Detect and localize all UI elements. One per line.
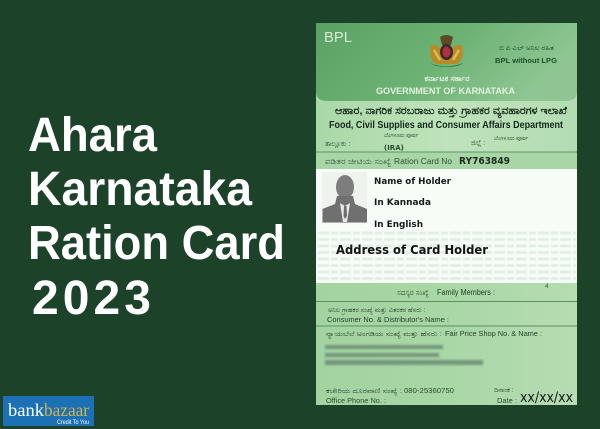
faded text pattern — [318, 233, 576, 278]
holder fields: In English — [374, 220, 423, 230]
logo: bankbazaar: bazaar — [44, 400, 89, 420]
family members: 4 — [545, 284, 549, 290]
logo: bankbazaar — [3, 396, 94, 426]
title: Karnataka — [28, 163, 252, 216]
taluk and district: ಬೆಂಗಳೂರು ಪೂರ್ವ — [494, 136, 529, 142]
title: 2023 — [32, 272, 151, 325]
family members: ಸದಸ್ಯರ ಸಂಖ್ಯೆ — [397, 290, 429, 299]
office phone: Office Phone No. : — [326, 396, 386, 405]
address: Address of Card Holder — [336, 243, 488, 257]
department name — [329, 105, 568, 131]
consumer number: Consumer No. & Distributor's Name : — [327, 315, 449, 324]
department name: Food, Civil Supplies and Consumer Affairs Department — [329, 120, 564, 131]
title: Ration Card — [28, 217, 285, 270]
office phone — [326, 386, 454, 405]
date — [494, 387, 573, 406]
logo: bankbazaar: bank — [8, 400, 44, 420]
BPL category: ಬಿ ಪಿ ಎಲ್ ಅನಿಲ ರಹಿತ — [499, 45, 555, 52]
government name: ಕರ್ನಾಟಕ ಸರ್ಕಾರ — [424, 74, 470, 83]
ration card — [316, 23, 577, 406]
holder photo placeholder — [322, 172, 367, 223]
BPL category: BPL without LPG — [495, 56, 557, 65]
title: Ahara — [28, 109, 157, 162]
BPL category — [495, 45, 557, 65]
BPL label: BPL — [324, 29, 352, 46]
ration card number band: Ration Card No — [394, 157, 453, 166]
title — [28, 109, 285, 325]
consumer number: ಅನಿಲ ಗ್ರಾಹಕರ ಸಂಖ್ಯೆ ಮತ್ತು ವಿತರಕರ ಹೆಸರು : — [328, 307, 426, 315]
blurred shop address — [325, 345, 483, 365]
date: Date : — [497, 398, 517, 405]
ration card number band — [316, 152, 577, 169]
family members — [397, 284, 549, 299]
emblem — [430, 35, 463, 67]
ration card number band: RY763849 — [459, 156, 510, 167]
card header band — [316, 23, 577, 101]
card upper light section — [316, 90, 577, 152]
office phone: 080-25360750 — [404, 386, 454, 395]
office phone: ಕಚೇರಿಯ ದೂರವಾಣಿ ಸಂಖ್ಯೆ : — [326, 388, 402, 396]
family members: Family Members : — [437, 288, 495, 297]
consumer number — [327, 307, 449, 324]
logo: bankbazaar: Credit To You — [57, 420, 89, 426]
government name: GOVERNMENT OF KARNATAKA — [376, 86, 515, 97]
taluk and district — [325, 133, 529, 152]
holder fields: In Kannada — [374, 198, 431, 208]
date: xx/xx/xx — [520, 390, 573, 406]
taluk and district: (IRA) — [384, 144, 404, 152]
taluk and district: ಜಿಲ್ಲೆ : — [471, 140, 485, 147]
fair price shop: Fair Price Shop No. & Name : — [445, 329, 542, 338]
taluk and district: ಬೆಂಗಳೂರು ಪೂರ್ವ — [384, 133, 419, 139]
date: ದಿನಾಂಕ : — [494, 387, 514, 394]
government name — [376, 74, 515, 97]
taluk and district: ತಾಲ್ಲೂಕು : — [325, 141, 350, 148]
ration card number band: ಪಡಿತರ ಚೀಟಿಯ ಸಂಖ್ಯೆ — [325, 157, 392, 167]
holder fields: Name of Holder — [374, 177, 452, 187]
white holder panel — [316, 169, 577, 283]
department name: ಆಹಾರ, ನಾಗರಿಕ ಸರಬರಾಜು ಮತ್ತು ಗ್ರಾಹಕರ ವ್ಯವಹಾರಗಳ ಇಲಾಖೆ — [335, 105, 568, 119]
fair price shop: ನ್ಯಾಯಬೆಲೆ ಅಂಗಡಿಯ ಸಂಖ್ಯೆ ಮತ್ತು ಹೆಸರು : — [326, 331, 442, 339]
fair price shop — [326, 329, 542, 339]
holder fields — [374, 177, 452, 230]
card base — [316, 23, 577, 405]
